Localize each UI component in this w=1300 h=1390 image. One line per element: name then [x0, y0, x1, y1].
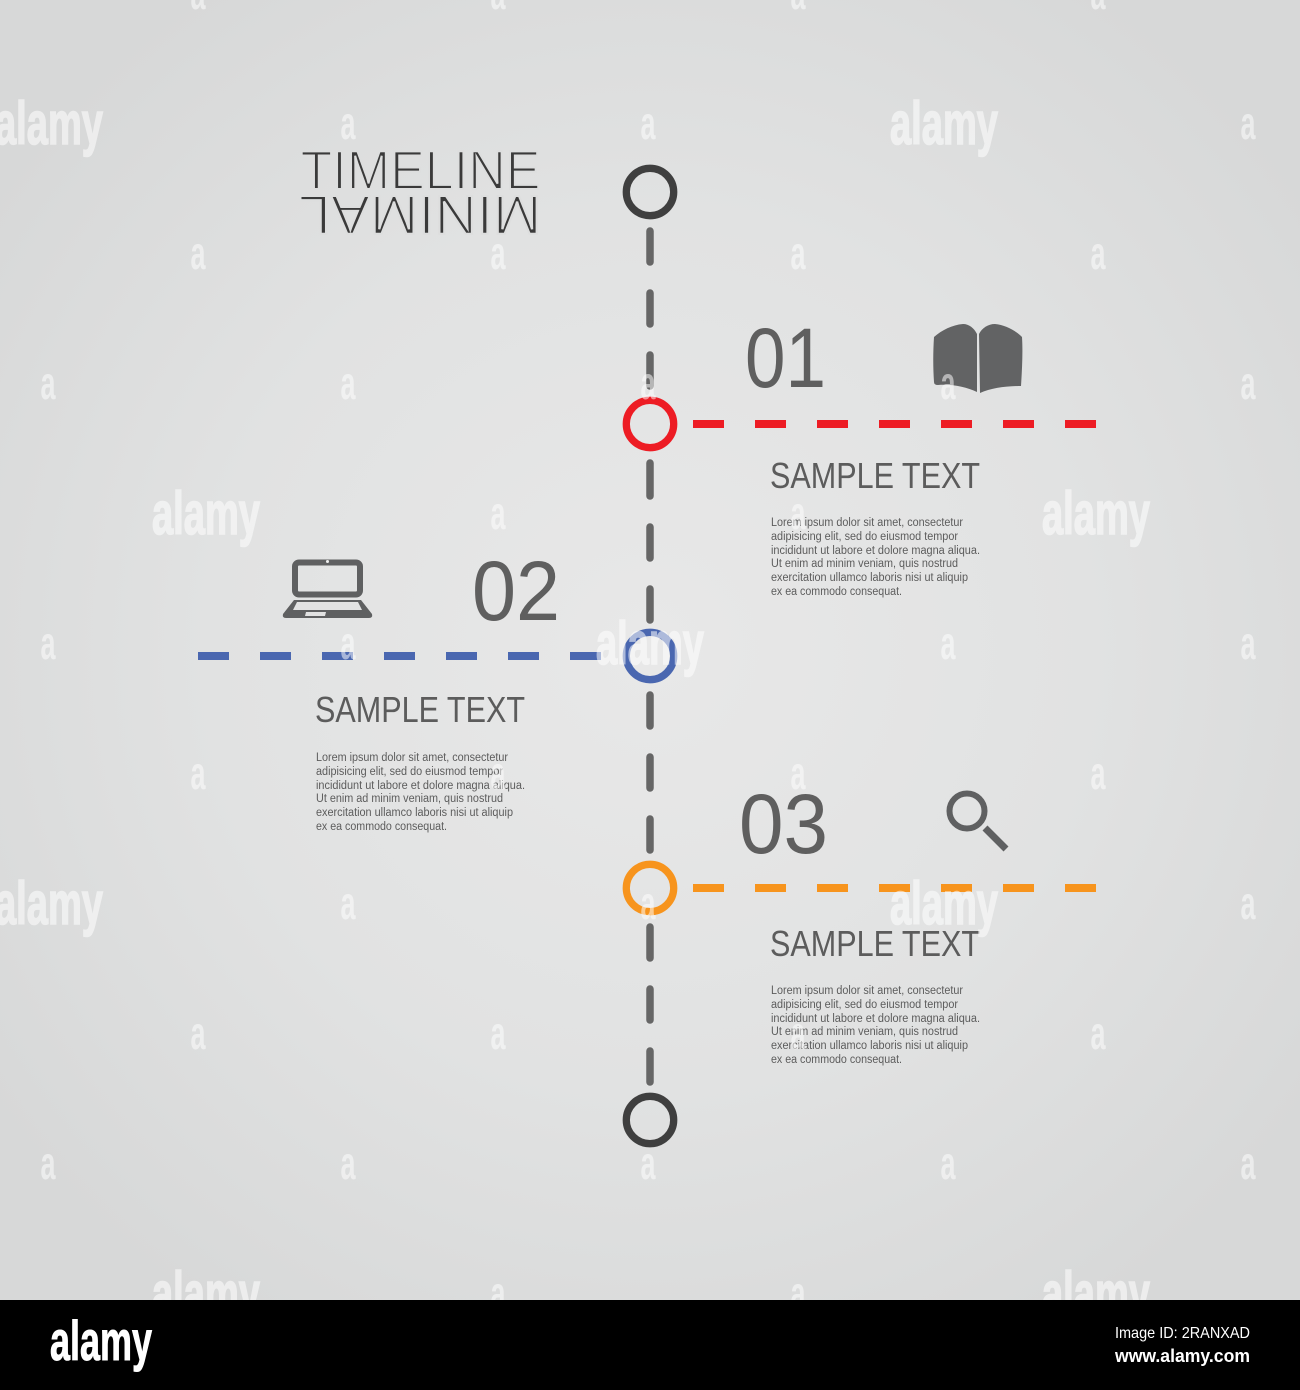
watermark overlay: a [640, 357, 656, 409]
icon: magnifying glass [950, 794, 1006, 849]
watermark overlay: a [490, 227, 506, 279]
watermark overlay: a [40, 617, 56, 669]
step 02 body text: ex ea commodo consequat. [316, 821, 447, 833]
watermark overlay: alamy [152, 480, 260, 547]
watermark overlay: a [1240, 617, 1256, 669]
title: timeline minimal: TIMELINE [300, 139, 540, 201]
step 01 body text: Lorem ipsum dolor sit amet, consectetur [771, 517, 963, 529]
title: timeline minimal [298, 139, 542, 246]
watermark overlay: alamy [596, 610, 704, 677]
step 01 body text: incididunt ut labore et dolore magna aliqua. [771, 545, 980, 557]
watermark overlay: a [1090, 227, 1106, 279]
watermark overlay: a [40, 1137, 56, 1189]
watermark overlay: a [940, 1137, 956, 1189]
step 03 heading: SAMPLE TEXT [770, 923, 980, 964]
watermark overlay: a [1090, 747, 1106, 799]
watermark overlay: a [40, 357, 56, 409]
step 03 body text: adipisicing elit, sed do eiusmod tempor [771, 999, 958, 1011]
step 01 body text: exercitation ullamco laboris nisi ut aliquip [771, 572, 968, 584]
watermark overlay: a [790, 1267, 806, 1319]
step 02 [198, 544, 674, 833]
step 03 number: 03 [739, 777, 828, 871]
step 01 node [626, 400, 674, 448]
watermark overlay: a [190, 747, 206, 799]
watermark overlay: a [190, 227, 206, 279]
step 01 body text: Ut enim ad minim veniam, quis nostrud [771, 558, 958, 570]
icon: open book [933, 324, 1022, 393]
watermark overlay: alamy [1042, 480, 1150, 547]
step 02 heading: SAMPLE TEXT [315, 689, 525, 730]
watermark overlay: alamy [0, 870, 103, 937]
watermark overlay: a [1240, 97, 1256, 149]
watermark overlay: a [490, 747, 506, 799]
watermark overlay: a [790, 747, 806, 799]
image id: Image ID: 2RANXAD [1115, 1325, 1250, 1342]
watermark overlay: a [640, 877, 656, 929]
watermark overlay: alamy [890, 870, 998, 937]
step 02 number: 02 [472, 544, 560, 638]
watermark overlay: a [340, 1137, 356, 1189]
footer logo: alamy [50, 1309, 152, 1372]
step 02 body text: exercitation ullamco laboris nisi ut aliquip [316, 807, 513, 819]
step 03 [626, 777, 1096, 1066]
step 02 node [626, 632, 674, 680]
icon: laptop [283, 560, 372, 618]
title: timeline minimal: MINIMAL [299, 184, 542, 246]
watermark overlay: a [190, 1007, 206, 1059]
step 03 body text: Lorem ipsum dolor sit amet, consectetur [771, 985, 963, 997]
step 02 dashed line [198, 652, 601, 660]
watermark overlay: a [790, 227, 806, 279]
watermark overlay: a [490, 1267, 506, 1319]
step 02 body text: Ut enim ad minim veniam, quis nostrud [316, 793, 503, 805]
watermark overlay: alamy [1042, 1260, 1150, 1327]
watermark overlay: a [790, 1007, 806, 1059]
step 01 body text: adipisicing elit, sed do eiusmod tempor [771, 531, 958, 543]
step 03 dashed line [693, 884, 1096, 892]
watermark overlay: a [1240, 1137, 1256, 1189]
watermark overlay: a [940, 357, 956, 409]
step 01 body text: ex ea commodo consequat. [771, 586, 902, 598]
watermark overlay: a [640, 97, 656, 149]
step 03 body text: incididunt ut labore et dolore magna aliqua. [771, 1013, 980, 1025]
step 01 body text [771, 517, 980, 598]
watermark overlay: alamy [0, 90, 103, 157]
step 03 node [626, 864, 674, 912]
step 01 dashed line [693, 420, 1096, 428]
footer bar [0, 1300, 1300, 1390]
watermark overlay: a [490, 1007, 506, 1059]
watermark overlay: a [340, 97, 356, 149]
step 03 body text: Ut enim ad minim veniam, quis nostrud [771, 1026, 958, 1038]
vertical dashed timeline [646, 231, 654, 1082]
step 02 body text: adipisicing elit, sed do eiusmod tempor [316, 766, 503, 778]
watermark overlay: a [1240, 877, 1256, 929]
step 02 body text: incididunt ut labore et dolore magna aliqua. [316, 780, 525, 792]
watermark overlay: a [1090, 1007, 1106, 1059]
end node [626, 1096, 674, 1144]
watermark overlay: a [1240, 357, 1256, 409]
step 01 heading: SAMPLE TEXT [770, 455, 980, 496]
step 01 number: 01 [745, 311, 826, 405]
website: www.alamy.com [1114, 1346, 1250, 1366]
step 03 body text [771, 985, 980, 1066]
watermark overlay: a [490, 487, 506, 539]
watermark overlay: a [640, 1137, 656, 1189]
start node [626, 168, 674, 216]
step 02 body text: Lorem ipsum dolor sit amet, consectetur [316, 752, 508, 764]
step 01 [626, 311, 1096, 598]
watermark overlay: alamy [152, 1260, 260, 1327]
watermark overlay: a [940, 617, 956, 669]
step 02 body text [316, 752, 525, 833]
step 03 body text: ex ea commodo consequat. [771, 1054, 902, 1066]
watermark overlay: a [340, 617, 356, 669]
watermark overlay: a [340, 357, 356, 409]
watermark overlay: alamy [890, 90, 998, 157]
step 03 body text: exercitation ullamco laboris nisi ut aliquip [771, 1040, 968, 1052]
watermark overlay: a [340, 877, 356, 929]
watermark overlay: a [790, 487, 806, 539]
